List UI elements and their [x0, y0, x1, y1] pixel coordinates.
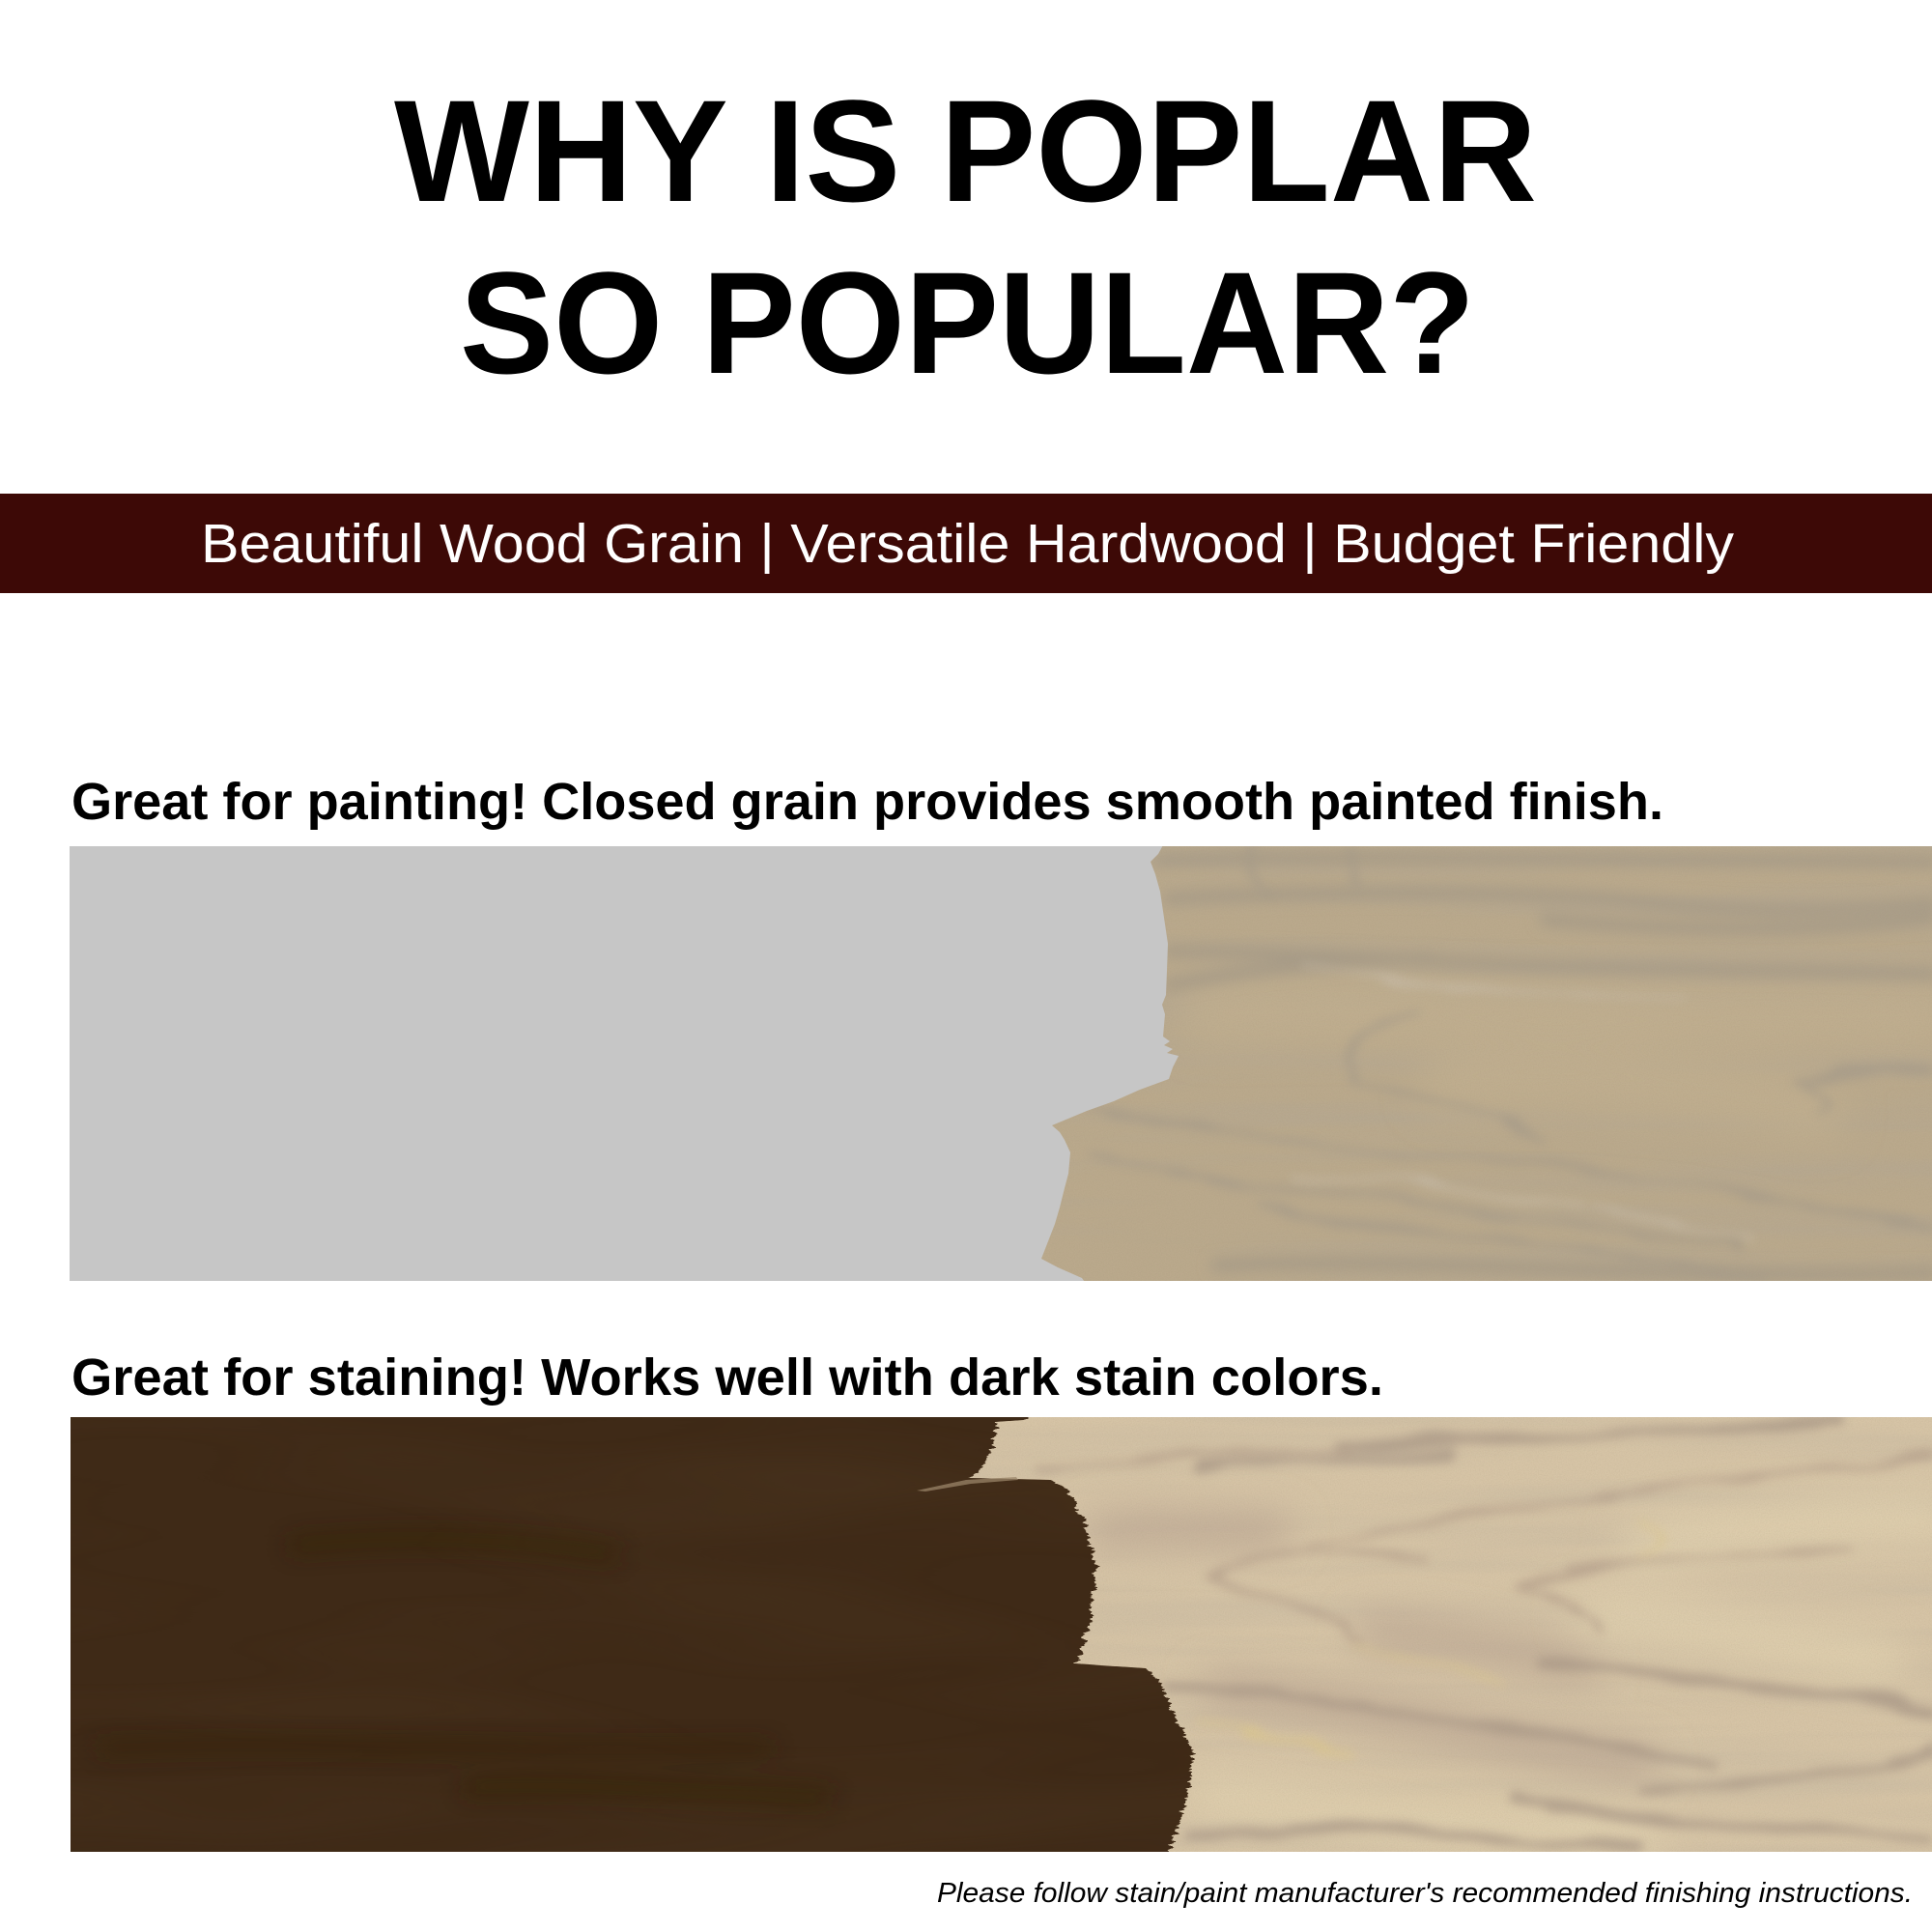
- heading: painting: Great for painting! Closed grain provides smooth painted finish.: [71, 773, 1663, 831]
- subtitle band: [0, 494, 1932, 593]
- feathered brush strip: [917, 1477, 1018, 1492]
- subtitle band: Beautiful Wood Grain | Versatile Hardwood | Budget Friendly: [201, 513, 1735, 575]
- title: [394, 70, 1537, 404]
- stain coat: [29, 1410, 1217, 1864]
- raw wood, painting panel: [1041, 846, 1932, 1281]
- paint coat: [58, 831, 1179, 1285]
- title: SO POPULAR?: [460, 242, 1475, 404]
- raw wood, staining panel: [968, 1417, 1932, 1852]
- panel: painted poplar board: [58, 831, 1932, 1285]
- heading: staining: Great for staining! Works well with dark stain colors.: [71, 1349, 1383, 1406]
- title: WHY IS POPLAR: [394, 70, 1537, 232]
- footnote: Please follow stain/paint manufacturer's recommended finishing instructions.: [937, 1878, 1913, 1909]
- panel: stained poplar board: [29, 1410, 1932, 1864]
